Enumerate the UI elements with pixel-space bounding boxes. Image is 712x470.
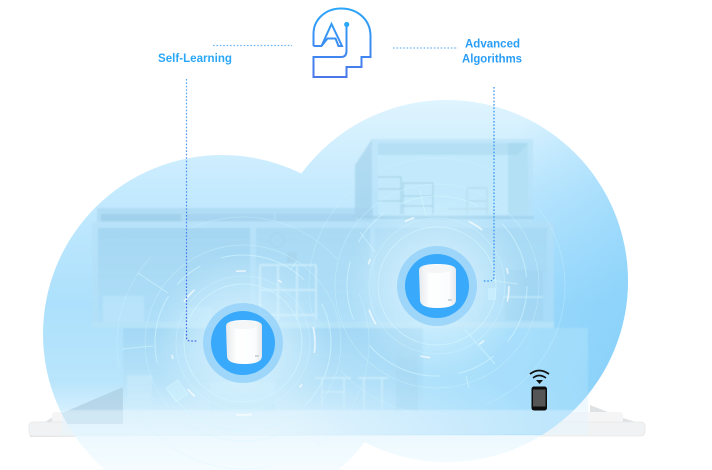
lower floor [123, 328, 588, 412]
dotted connector: icon to Advanced Algorithms [393, 47, 458, 49]
dotted connector: icon to Self-Learning [213, 44, 292, 46]
middle floor [92, 222, 554, 328]
icon: phone with wifi signal [530, 370, 549, 410]
wireless signal rings around right router [309, 158, 565, 414]
dotted connector: Self-Learning down to left router [186, 79, 198, 341]
upper floor room [355, 139, 534, 223]
floor band [62, 410, 588, 435]
router body [226, 320, 262, 364]
icon: AI head [314, 8, 370, 77]
house cutaway model [62, 139, 588, 435]
white platform base [29, 387, 645, 437]
platform seen through cloud [60, 387, 123, 424]
dotted connector: Advanced Algorithms down to right router [482, 87, 494, 281]
left router [203, 303, 283, 383]
right router [397, 246, 477, 326]
wireless signal rings around left router [117, 217, 369, 469]
label: Self-Learning: Self-Learning [158, 51, 232, 65]
blue cloud background [43, 100, 628, 470]
label: Advanced Algorithms: Algorithms [462, 52, 522, 66]
label: Advanced Algorithms: Advanced [465, 36, 520, 50]
router body [419, 264, 456, 308]
roof band [97, 208, 373, 222]
